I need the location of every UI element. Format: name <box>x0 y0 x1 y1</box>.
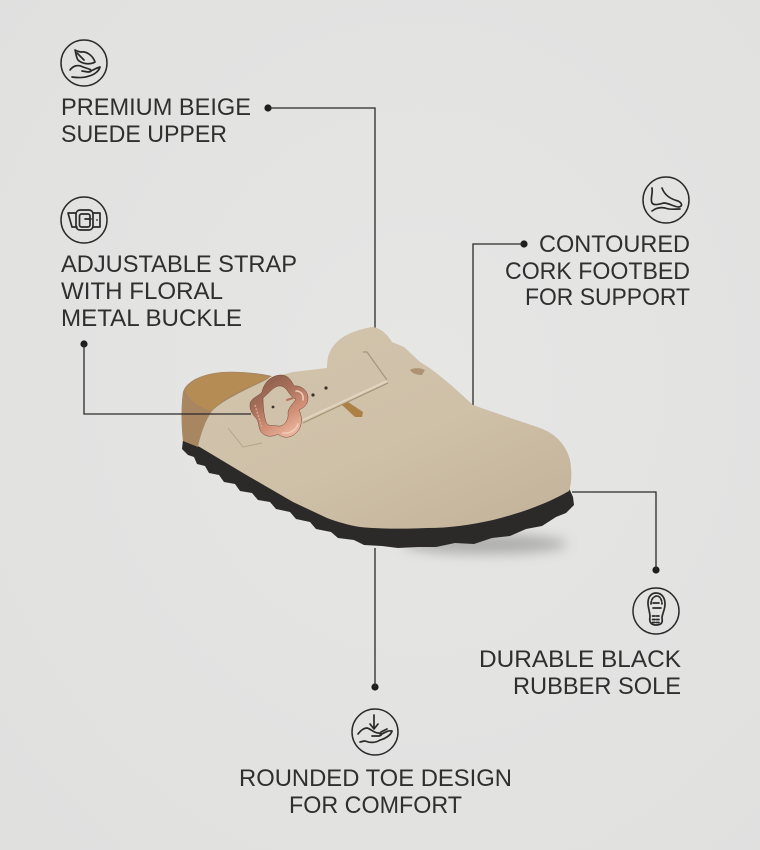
leader line: rounded toe <box>371 548 379 691</box>
heading: premium beige suede upper: SUEDE UPPER <box>61 121 227 148</box>
heading: rounded toe design: FOR COMFORT <box>289 792 462 819</box>
icon: leaf in hand <box>61 40 107 86</box>
heading: contoured cork footbed: FOR SUPPORT <box>525 284 690 311</box>
cork slot <box>342 402 363 417</box>
strap tail edge <box>228 428 262 447</box>
heading: durable black rubber sole: DURABLE BLACK <box>479 646 681 673</box>
heading: contoured cork footbed <box>505 231 690 311</box>
suede upper <box>198 327 571 529</box>
heading: premium beige suede upper <box>61 94 251 148</box>
heading: premium beige suede upper: PREMIUM BEIGE <box>61 94 251 121</box>
heading: adjustable strap <box>61 251 297 332</box>
floral metal buckle <box>250 375 308 437</box>
leader line: cork footbed <box>473 240 528 406</box>
leader line: strap and buckle <box>80 340 251 414</box>
heading: contoured cork footbed: CORK FOOTBED <box>505 258 690 285</box>
heading: adjustable strap: METAL BUCKLE <box>61 305 242 332</box>
cork footbed inner <box>185 373 270 411</box>
heading: durable black rubber sole <box>479 646 681 700</box>
heading: contoured cork footbed: CONTOURED <box>539 231 690 258</box>
small strap notch <box>410 368 425 375</box>
icon: belt buckle <box>61 197 107 243</box>
cork heel outer <box>182 372 272 447</box>
icon: arrow into open hand <box>352 709 398 755</box>
heading: rounded toe design <box>239 765 512 819</box>
heading: adjustable strap: WITH FLORAL <box>61 278 223 305</box>
leader line: suede upper <box>264 104 375 330</box>
heading: rounded toe design: ROUNDED TOE DESIGN <box>239 765 512 792</box>
shoe illustration <box>182 327 574 554</box>
rubber sole <box>182 440 574 548</box>
strap holes <box>272 386 328 408</box>
ground shadow <box>403 534 567 554</box>
heading: durable black rubber sole: RUBBER SOLE <box>513 673 681 700</box>
strap slit <box>363 352 387 380</box>
icon: foot on footbed <box>643 177 689 223</box>
heading: adjustable strap: ADJUSTABLE STRAP <box>61 251 297 278</box>
strap lower seam <box>303 381 388 423</box>
leader line: rubber sole <box>572 492 660 574</box>
icon: shoe tread <box>633 588 679 634</box>
